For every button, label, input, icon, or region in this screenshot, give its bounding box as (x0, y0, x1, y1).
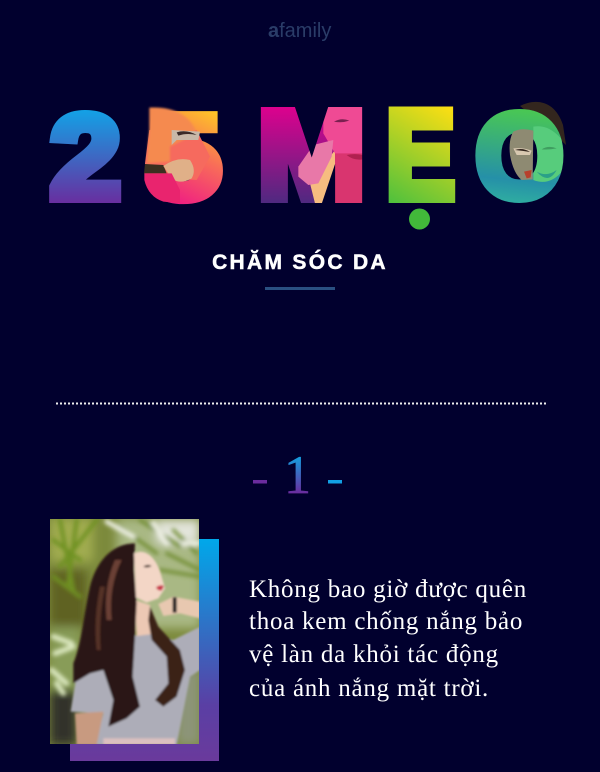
photo: girl looking up (50, 518, 200, 745)
tip text: thoa kem chống nắng bảo (249, 608, 523, 635)
portrait filling letter 5 (144, 107, 210, 203)
dot under E (409, 208, 430, 230)
letter O with portrait (475, 109, 564, 203)
hair: main mass (73, 543, 140, 727)
letter 5 (144, 111, 223, 204)
numeral: 1 (284, 445, 311, 505)
face inside O hole (510, 129, 533, 180)
tip text: vệ làn da khỏi tác động (249, 641, 499, 668)
letter 2 (49, 110, 122, 203)
left dash (253, 480, 267, 484)
section number 1 (253, 445, 342, 505)
letter M with portrait (260, 107, 362, 203)
subtitle: CHĂM SÓC DA (212, 250, 388, 274)
dotted divider (56, 402, 546, 404)
tip text: của ánh nắng mặt trời. (249, 675, 489, 702)
face (134, 552, 165, 603)
right dash (328, 480, 342, 484)
hair behind O (520, 102, 566, 145)
hair: right strand (148, 607, 185, 707)
letter E (388, 106, 456, 203)
shirt (71, 627, 200, 745)
logo: afamily: afamily (268, 20, 331, 42)
gradient panel behind photo (70, 539, 219, 761)
subtitle underline (265, 287, 335, 290)
wristband (173, 597, 177, 613)
lower arm (75, 712, 103, 745)
foliage backdrop (50, 518, 200, 745)
skirt hem (103, 738, 175, 745)
hand and upper arm (158, 597, 200, 618)
title: 25 MẸO (35, 100, 575, 230)
neck (135, 600, 153, 636)
tip text: Không bao giờ được quên (249, 576, 527, 603)
